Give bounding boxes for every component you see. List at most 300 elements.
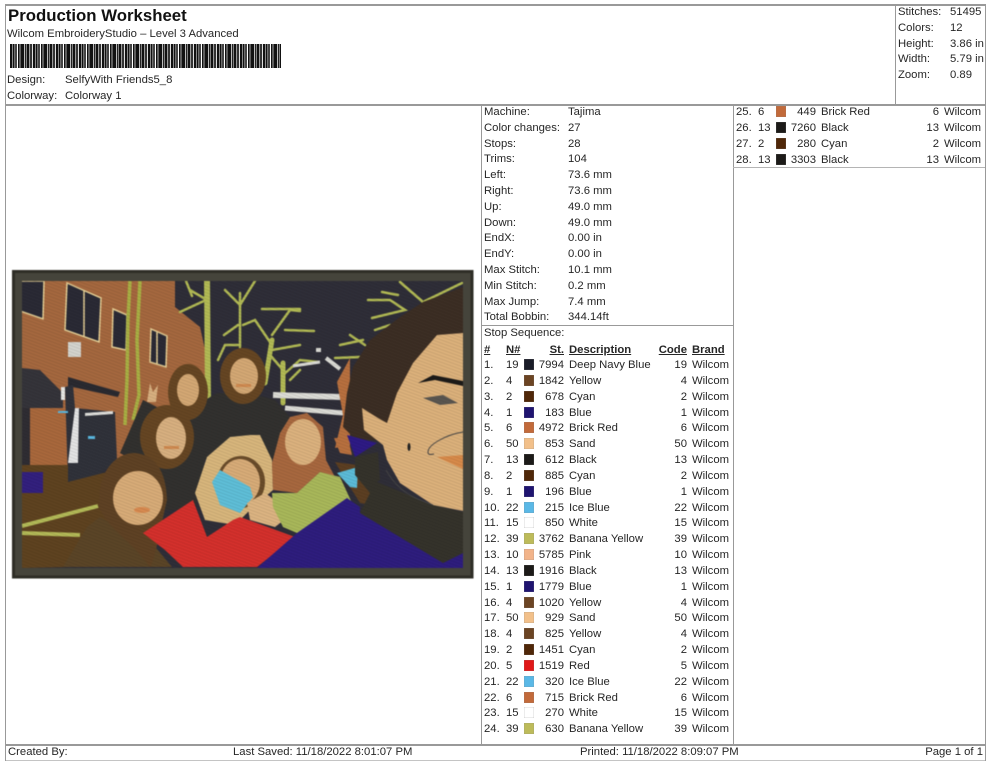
width: 5.79 in xyxy=(950,53,984,65)
stop sequence heading: Stop Sequence: xyxy=(484,327,564,339)
row 27: 2 xyxy=(758,138,764,150)
row 13 xyxy=(484,549,729,561)
row 27: Cyan xyxy=(821,138,847,150)
left: Left: xyxy=(484,169,506,181)
row 18: Yellow xyxy=(569,628,601,640)
colors xyxy=(898,22,963,34)
row 21: Wilcom xyxy=(692,676,729,688)
row 7: 7. xyxy=(484,454,493,466)
row 10: 10. xyxy=(484,502,500,514)
row 22: Brick Red xyxy=(569,692,618,704)
row 25: Brick Red xyxy=(821,106,870,118)
row 15 xyxy=(481,579,731,595)
design name: SelfyWith Friends5_8 xyxy=(65,74,172,86)
row 23: 23. xyxy=(484,707,500,719)
stops: Stops: xyxy=(484,138,516,150)
row 17: 50 xyxy=(674,612,687,624)
row 9: Blue xyxy=(569,486,592,498)
woman middle xyxy=(140,405,194,469)
door highlights xyxy=(58,408,113,463)
row 6: Wilcom xyxy=(692,438,729,450)
row 22: 6 xyxy=(506,692,512,704)
row 24: 24. xyxy=(484,723,500,735)
width: Width: xyxy=(898,53,930,65)
row 3: Wilcom xyxy=(692,391,729,403)
table header xyxy=(484,344,725,356)
row 10: 215 xyxy=(545,502,564,514)
red jacket xyxy=(143,500,295,567)
row 4: 4. xyxy=(484,406,493,418)
up: Up: xyxy=(484,201,502,213)
created by: Created By: xyxy=(8,746,68,758)
man's facial features xyxy=(386,375,463,505)
end x: EndX: xyxy=(484,232,515,244)
stitches xyxy=(898,6,981,18)
stitches: Stitches: xyxy=(898,6,941,18)
row 3: 3. xyxy=(484,391,493,403)
row 26: 13 xyxy=(926,122,939,134)
row 28: 13 xyxy=(758,154,771,166)
row 24: 39 xyxy=(506,723,519,735)
door xyxy=(64,386,118,468)
color changes: 27 xyxy=(568,122,581,134)
max jump xyxy=(484,296,606,308)
row 13: Wilcom xyxy=(692,549,729,561)
row 1: 1. xyxy=(484,359,493,371)
barcode xyxy=(10,44,281,68)
row 7: 612 xyxy=(545,454,564,466)
row 15: 1 xyxy=(681,581,687,593)
row 9: 1 xyxy=(681,486,687,498)
lamp and dark awnings xyxy=(22,342,120,408)
height: 3.86 in xyxy=(950,38,984,50)
row 6: 50 xyxy=(674,438,687,450)
max stitch: 10.1 mm xyxy=(568,264,612,276)
lower brick wall xyxy=(22,408,70,465)
row 28: 3303 xyxy=(791,154,816,166)
row 4: Wilcom xyxy=(692,406,729,418)
down: Down: xyxy=(484,217,516,229)
row 2: Yellow xyxy=(569,375,601,387)
row 28: 28. xyxy=(736,154,752,166)
row 18: 4 xyxy=(506,628,512,640)
stop sequence continuation table xyxy=(733,104,985,167)
row 23: 15 xyxy=(506,707,519,719)
row 23: 15 xyxy=(674,707,687,719)
row 15: 15. xyxy=(484,581,500,593)
row 1: 7994 xyxy=(539,359,564,371)
row 1 xyxy=(484,359,729,371)
wall vines xyxy=(125,281,140,425)
row 24 xyxy=(481,721,731,737)
row 17: 17. xyxy=(484,612,500,624)
last saved: Last Saved: 11/18/2022 8:01:07 PM xyxy=(233,746,412,758)
row 4: 183 xyxy=(545,406,564,418)
row 19 xyxy=(481,642,731,658)
row 21: 21. xyxy=(484,676,500,688)
row 28 xyxy=(733,152,983,168)
row 8: 2 xyxy=(681,470,687,482)
height xyxy=(898,38,984,50)
row 5: 5. xyxy=(484,422,493,434)
up: 49.0 mm xyxy=(568,201,612,213)
woman top right xyxy=(220,348,266,404)
row 15: Wilcom xyxy=(692,581,729,593)
stop sequence table xyxy=(484,344,729,735)
row 7: Black xyxy=(569,454,597,466)
row 25 xyxy=(733,104,983,120)
row 26: 13 xyxy=(758,122,771,134)
trims: 104 xyxy=(568,153,587,165)
yellow kerb lines xyxy=(22,506,98,535)
purple box xyxy=(22,472,43,493)
left xyxy=(484,169,612,181)
max jump: 7.4 mm xyxy=(568,296,606,308)
row 14: 1916 xyxy=(539,565,564,577)
table header: St. xyxy=(550,344,564,356)
row 28: Wilcom xyxy=(944,154,981,166)
embroidery design picture xyxy=(11,269,474,580)
snow bands xyxy=(273,350,343,413)
table header: Description xyxy=(569,344,631,356)
height: Height: xyxy=(898,38,934,50)
colors: 12 xyxy=(950,22,963,34)
row 13: 13. xyxy=(484,549,500,561)
row 7 xyxy=(484,454,729,466)
row 16: 16. xyxy=(484,596,500,608)
row 9: Wilcom xyxy=(692,486,729,498)
purple jacket xyxy=(257,498,463,568)
width xyxy=(898,53,984,65)
row 25: 6 xyxy=(758,106,764,118)
row 13: 10 xyxy=(674,549,687,561)
row 8: 2 xyxy=(506,470,512,482)
row 17 xyxy=(481,610,731,626)
row 11: 15 xyxy=(674,517,687,529)
trims: Trims: xyxy=(484,153,515,165)
machine: Tajima xyxy=(568,106,601,118)
row 21: 22 xyxy=(506,676,519,688)
down: 49.0 mm xyxy=(568,217,612,229)
row 11 xyxy=(484,517,729,529)
row 19: Wilcom xyxy=(692,644,729,656)
row 16 xyxy=(481,594,731,610)
stitch texture xyxy=(22,281,463,568)
row 6: Sand xyxy=(569,438,595,450)
row 2: 4 xyxy=(506,375,512,387)
row 14: Wilcom xyxy=(692,565,729,577)
row 15: 1 xyxy=(506,581,512,593)
row 8: 8. xyxy=(484,470,493,482)
min stitch: Min Stitch: xyxy=(484,280,537,292)
row 17: 929 xyxy=(545,612,564,624)
row 3: Cyan xyxy=(569,391,595,403)
row 15: 1779 xyxy=(539,581,564,593)
row 20: 5 xyxy=(506,660,512,672)
woman top left xyxy=(147,364,208,420)
row 26: 26. xyxy=(736,122,752,134)
row 8: Wilcom xyxy=(692,470,729,482)
machine: Machine: xyxy=(484,106,530,118)
row 20: 20. xyxy=(484,660,500,672)
row 24: 630 xyxy=(545,723,564,735)
stops: 28 xyxy=(568,138,581,150)
row 26: Black xyxy=(821,122,849,134)
row 10: Wilcom xyxy=(692,502,729,514)
design name: Design: xyxy=(7,74,45,86)
row 16: 1020 xyxy=(539,596,564,608)
row 26: 7260 xyxy=(791,122,816,134)
row 10: 22 xyxy=(506,502,519,514)
max stitch: Max Stitch: xyxy=(484,264,540,276)
row 3: 2 xyxy=(681,391,687,403)
colors: Colors: xyxy=(898,22,934,34)
row 5: 4972 xyxy=(539,422,564,434)
row 23 xyxy=(481,705,731,721)
row 3: 678 xyxy=(545,391,564,403)
row 22: 6 xyxy=(681,692,687,704)
row 5: 6 xyxy=(681,422,687,434)
row 25: Wilcom xyxy=(944,106,981,118)
row 11: 11. xyxy=(484,517,499,529)
row 22: 715 xyxy=(545,692,564,704)
min stitch: 0.2 mm xyxy=(568,280,606,292)
woman in hijab xyxy=(272,413,352,533)
row 19: 19. xyxy=(484,644,500,656)
row 5: Brick Red xyxy=(569,422,618,434)
row 2: 2. xyxy=(484,375,493,387)
row 27: 2 xyxy=(933,138,939,150)
zoom: Zoom: xyxy=(898,69,930,81)
row 6 xyxy=(484,438,729,450)
row 18: Wilcom xyxy=(692,628,729,640)
row 11: White xyxy=(569,517,598,529)
row 7: Wilcom xyxy=(692,454,729,466)
row 6: 853 xyxy=(545,438,564,450)
table header: N# xyxy=(506,344,520,356)
woman bottom left xyxy=(63,453,172,567)
row 13: 5785 xyxy=(539,549,564,561)
machine xyxy=(484,106,601,118)
trims xyxy=(484,153,587,165)
row 21: 320 xyxy=(545,676,564,688)
row 18: 825 xyxy=(545,628,564,640)
row 28: Black xyxy=(821,154,849,166)
row 21: 22 xyxy=(674,676,687,688)
row 10: Ice Blue xyxy=(569,502,610,514)
row 9: 196 xyxy=(545,486,564,498)
row 7: 13 xyxy=(506,454,519,466)
row 25: 449 xyxy=(797,106,816,118)
row 9: 1 xyxy=(506,486,512,498)
row 2: 1842 xyxy=(539,375,564,387)
row 20: Red xyxy=(569,660,590,672)
row 2: Wilcom xyxy=(692,375,729,387)
ground xyxy=(22,464,107,568)
printed: Printed: 11/18/2022 8:09:07 PM xyxy=(580,746,739,758)
row 1: 19 xyxy=(506,359,519,371)
row 19: Cyan xyxy=(569,644,595,656)
row 17: Sand xyxy=(569,612,595,624)
row 17: 50 xyxy=(506,612,519,624)
row 12: Wilcom xyxy=(692,533,729,545)
max stitch xyxy=(484,264,612,276)
row 10 xyxy=(484,502,729,514)
row 7: 13 xyxy=(674,454,687,466)
woman with mask xyxy=(195,435,273,525)
row 27 xyxy=(733,136,983,152)
row 23: Wilcom xyxy=(692,707,729,719)
row 11: 850 xyxy=(545,517,564,529)
row 3: 2 xyxy=(506,391,512,403)
row 25: 25. xyxy=(736,106,752,118)
night sky xyxy=(22,281,463,568)
footer xyxy=(6,745,985,760)
row 4 xyxy=(484,406,729,418)
row 10: 22 xyxy=(674,502,687,514)
row 17: Wilcom xyxy=(692,612,729,624)
row 11: Wilcom xyxy=(692,517,729,529)
row 13: 10 xyxy=(506,549,519,561)
row 27: Wilcom xyxy=(944,138,981,150)
row 2 xyxy=(484,375,729,387)
zoom: 0.89 xyxy=(950,69,972,81)
row 1: Deep Navy Blue xyxy=(569,359,651,371)
row 22 xyxy=(481,690,731,706)
row 5: Wilcom xyxy=(692,422,729,434)
zoom xyxy=(898,69,972,81)
row 26: Wilcom xyxy=(944,122,981,134)
total bobbin: 344.14ft xyxy=(568,311,609,323)
end x xyxy=(484,232,602,244)
blue shard xyxy=(347,435,377,457)
row 4: 1 xyxy=(506,406,512,418)
row 21: Ice Blue xyxy=(569,676,610,688)
bare trees xyxy=(180,281,462,403)
patch border xyxy=(12,270,474,578)
min stitch xyxy=(484,280,606,292)
right: 73.6 mm xyxy=(568,185,612,197)
colorway: Colorway: xyxy=(7,90,57,102)
row 12: Banana Yellow xyxy=(569,533,643,545)
row 23: 270 xyxy=(545,707,564,719)
end x: 0.00 in xyxy=(568,232,602,244)
row 24: Wilcom xyxy=(692,723,729,735)
row 23: White xyxy=(569,707,598,719)
end y: 0.00 in xyxy=(568,248,602,260)
man's face xyxy=(362,333,463,511)
page number: Page 1 of 1 xyxy=(925,746,983,758)
table header: Code xyxy=(659,344,687,356)
row 25: 6 xyxy=(933,106,939,118)
windows xyxy=(20,281,167,367)
row 9: 9. xyxy=(484,486,493,498)
end y xyxy=(484,248,602,260)
row 20: Wilcom xyxy=(692,660,729,672)
row 1: Wilcom xyxy=(692,359,729,371)
row 8 xyxy=(484,470,729,482)
hands xyxy=(246,494,282,528)
row 27: 27. xyxy=(736,138,752,150)
row 11: 15 xyxy=(506,517,519,529)
row 4: 1 xyxy=(681,406,687,418)
row 18 xyxy=(481,626,731,642)
total bobbin: Total Bobbin: xyxy=(484,311,549,323)
row 16: 4 xyxy=(506,596,512,608)
row 12: 12. xyxy=(484,533,500,545)
row 14 xyxy=(484,565,729,577)
row 22: 22. xyxy=(484,692,500,704)
lower right ground and water xyxy=(335,462,373,505)
row 8: 885 xyxy=(545,470,564,482)
row 14: 13 xyxy=(674,565,687,577)
right: Right: xyxy=(484,185,514,197)
machine info table xyxy=(484,106,612,323)
row 27: 280 xyxy=(797,138,816,150)
color changes: Color changes: xyxy=(484,122,560,134)
end y: EndY: xyxy=(484,248,514,260)
row 22: Wilcom xyxy=(692,692,729,704)
row 5: 6 xyxy=(506,422,512,434)
row 9 xyxy=(484,486,729,498)
row 24: 39 xyxy=(674,723,687,735)
patch scene xyxy=(20,281,463,568)
row 28: 13 xyxy=(926,154,939,166)
row 12 xyxy=(484,533,729,545)
row 24: Banana Yellow xyxy=(569,723,643,735)
row 14: Black xyxy=(569,565,597,577)
row 20: 1519 xyxy=(539,660,564,672)
row 16: 4 xyxy=(681,596,687,608)
back group dark clothing xyxy=(120,393,290,510)
row 6: 6. xyxy=(484,438,493,450)
man's dark collar xyxy=(355,452,463,563)
row 19: 2 xyxy=(681,644,687,656)
row 12: 39 xyxy=(674,533,687,545)
up xyxy=(484,201,612,213)
row 13: Pink xyxy=(569,549,591,561)
row 21 xyxy=(481,674,731,690)
row 26 xyxy=(733,120,983,136)
row 1: 19 xyxy=(674,359,687,371)
design name xyxy=(7,74,172,86)
stops xyxy=(484,138,581,150)
row 16: Wilcom xyxy=(692,596,729,608)
down xyxy=(484,217,612,229)
man's hair xyxy=(343,287,463,440)
row 5 xyxy=(484,422,729,434)
row 18: 18. xyxy=(484,628,500,640)
left: 73.6 mm xyxy=(568,169,612,181)
brick behind man xyxy=(334,358,352,455)
stitches: 51495 xyxy=(950,6,981,18)
row 4: Blue xyxy=(569,406,592,418)
row 20 xyxy=(481,658,731,674)
row 12: 39 xyxy=(506,533,519,545)
colorway xyxy=(7,90,122,102)
row 18: 4 xyxy=(681,628,687,640)
row 12: 3762 xyxy=(539,533,564,545)
dark stripe xyxy=(22,408,30,466)
row 19: 2 xyxy=(506,644,512,656)
software line: Wilcom EmbroideryStudio – Level 3 Advanced xyxy=(7,28,239,40)
row 16: Yellow xyxy=(569,596,601,608)
row 3 xyxy=(484,391,729,403)
right xyxy=(484,185,612,197)
table header: # xyxy=(484,344,490,356)
table header: Brand xyxy=(692,344,725,356)
brick building xyxy=(22,281,210,470)
